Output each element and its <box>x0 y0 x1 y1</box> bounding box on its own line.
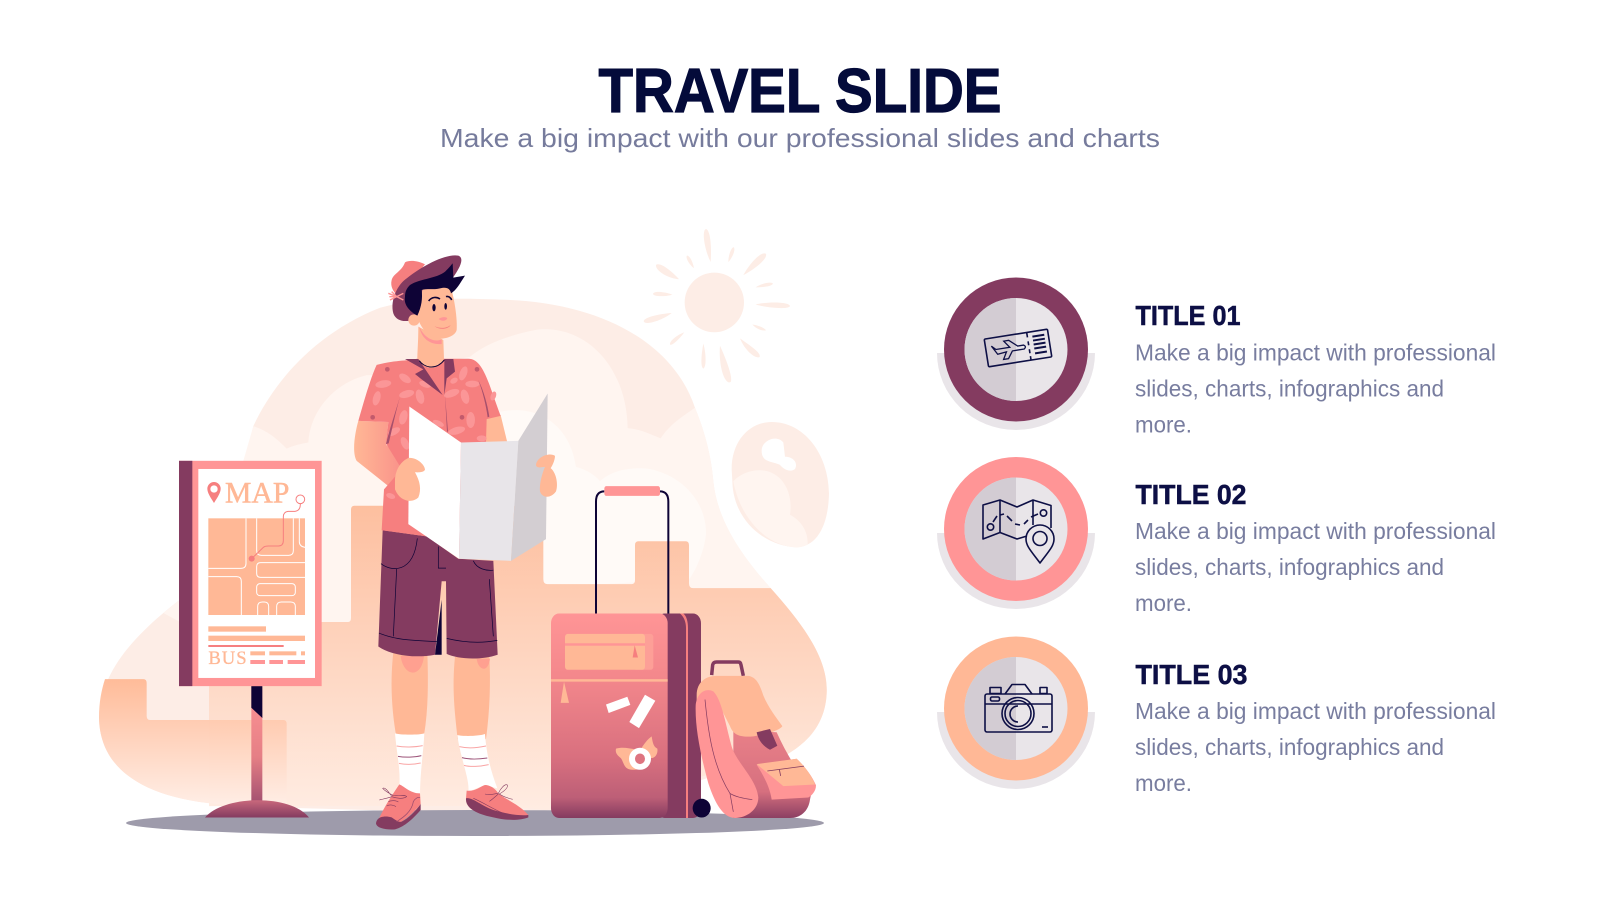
legs <box>392 653 490 739</box>
left hand <box>395 458 425 501</box>
subtitle: Make a big impact with our professional slides and charts <box>440 123 1160 153</box>
ground shadow <box>126 810 824 836</box>
suitcase <box>551 486 711 818</box>
icon: camera <box>985 684 1052 732</box>
sign heading MAP: MAP <box>225 478 289 510</box>
right upper arm <box>486 415 507 442</box>
hat <box>391 255 461 321</box>
item 02: map <box>937 457 1496 616</box>
sign board <box>179 461 322 686</box>
backpack strap <box>757 729 777 750</box>
flower <box>388 292 403 300</box>
face <box>408 283 457 339</box>
backpack front pocket <box>757 759 816 800</box>
text block 02: more. <box>1135 590 1192 616</box>
suitcase front <box>551 613 668 818</box>
suitcase trim <box>680 613 688 818</box>
shoes <box>376 784 528 829</box>
shirt <box>358 359 501 559</box>
text block 02 <box>1135 518 1496 616</box>
neck <box>417 327 444 368</box>
heading 02: TITLE 02 <box>1136 479 1246 510</box>
text block 01: slides, charts, infographics and <box>1135 376 1444 402</box>
title: TRAVEL SLIDE <box>598 57 1002 126</box>
heading 01: TITLE 01 <box>1136 300 1240 331</box>
icon: sun <box>644 229 790 382</box>
icon: plane ticket <box>984 329 1052 367</box>
socks <box>395 733 497 795</box>
text block 01: more. <box>1135 412 1192 438</box>
traveller figure <box>354 255 557 829</box>
background: clouds and city silhouette <box>99 229 829 816</box>
shirt pattern <box>370 365 497 500</box>
badge 02 <box>937 457 1095 609</box>
backpack flap <box>697 676 782 737</box>
heading 03: TITLE 03 <box>1136 659 1248 690</box>
backpack handle <box>712 662 743 676</box>
map tile with roads <box>208 495 305 615</box>
icon: map with pin <box>983 500 1054 563</box>
text block 03: more. <box>1135 770 1192 796</box>
sign base <box>205 800 309 818</box>
suitcase handle <box>596 486 668 613</box>
head with hat <box>388 255 465 395</box>
text block 03: Make a big impact with professional <box>1135 698 1496 724</box>
folded map <box>408 393 548 561</box>
backpack <box>696 662 816 818</box>
text block 02: slides, charts, infographics and <box>1135 554 1444 580</box>
text block 01: Make a big impact with professional <box>1135 340 1496 366</box>
backpack side pocket <box>696 690 758 818</box>
backpack body <box>733 730 812 818</box>
item 01: ticket <box>937 278 1496 438</box>
text block 03 <box>1135 698 1496 796</box>
map sign <box>179 461 322 818</box>
shirt buttons and seams <box>370 367 489 444</box>
badge 03 <box>937 636 1095 789</box>
collar and necklace <box>405 359 455 395</box>
bus timetable: BUS <box>208 648 247 669</box>
badge 01 <box>937 278 1095 430</box>
icon: map pin <box>207 482 221 503</box>
text block 03: slides, charts, infographics and <box>1135 734 1444 760</box>
suitcase zipper <box>551 679 668 703</box>
suitcase shell <box>657 613 701 818</box>
shirt leaf pattern <box>371 365 497 500</box>
sign pole <box>251 686 262 804</box>
hair <box>405 263 465 316</box>
shorts <box>378 530 498 658</box>
item 03: camera <box>937 636 1496 796</box>
background: cloud blob <box>732 422 829 547</box>
suitcase pocket <box>565 634 653 670</box>
suitcase wheel <box>693 799 711 818</box>
text block 02: Make a big impact with professional <box>1135 518 1496 544</box>
right hand <box>536 454 557 497</box>
left arm <box>354 421 408 491</box>
illustration: traveller scene <box>99 229 829 836</box>
luggage stickers <box>606 695 657 770</box>
bus timetable <box>208 626 305 669</box>
text block 01 <box>1135 340 1496 438</box>
